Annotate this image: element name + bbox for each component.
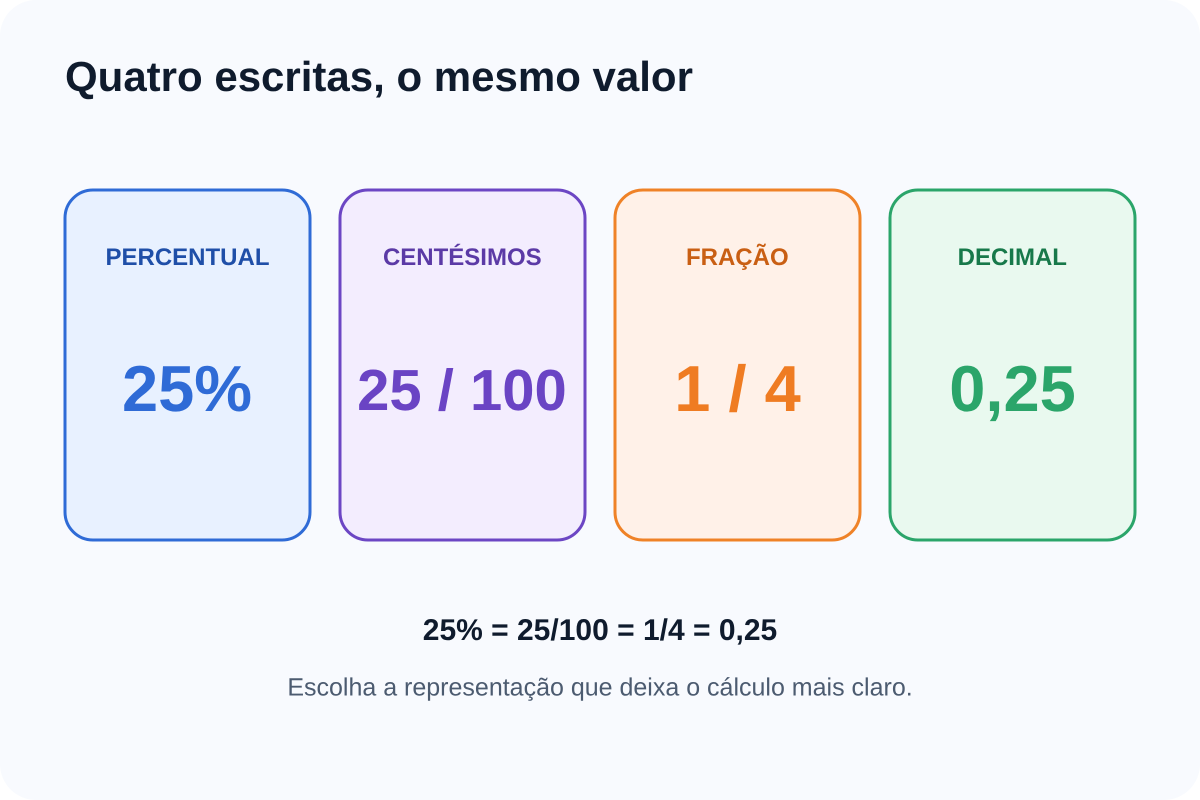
- panel: percentual: [65, 190, 310, 540]
- caption: Escolha a representação que deixa o cálculo mais claro.: [287, 674, 913, 702]
- label: fracao: FRAÇÃO: [686, 243, 789, 271]
- label: decimal: DECIMAL: [958, 244, 1067, 271]
- value: 25 / 100: 25 / 100: [357, 358, 567, 423]
- card: centesimos: [340, 190, 585, 540]
- panel: centesimos: [340, 190, 585, 540]
- card: percentual: [65, 190, 310, 540]
- value: 25%: 25%: [122, 352, 252, 425]
- label: percentual: PERCENTUAL: [105, 244, 270, 271]
- panel: fracao: [615, 190, 860, 540]
- card: fracao: [615, 190, 860, 540]
- label: centesimos: CENTÉSIMOS: [383, 243, 542, 271]
- value: 1 / 4: 1 / 4: [674, 352, 801, 425]
- equation: 25% = 25/100 = 1/4 = 0,25: [423, 614, 777, 647]
- card: decimal: [890, 190, 1135, 540]
- value: 0,25: 0,25: [949, 352, 1076, 425]
- title: Quatro escritas, o mesmo valor: [65, 53, 693, 100]
- panel: decimal: [890, 190, 1135, 540]
